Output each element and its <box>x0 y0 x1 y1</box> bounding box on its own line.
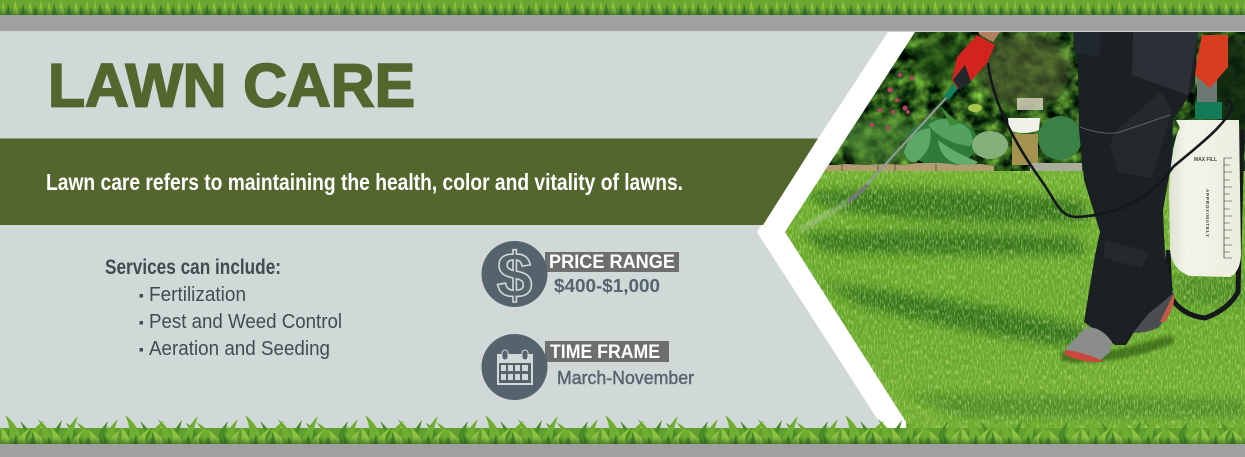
gloves <box>952 32 1228 90</box>
time value: March-November <box>557 368 694 388</box>
top grass strip <box>0 0 1245 15</box>
price range block <box>482 239 679 311</box>
title: LAWN CARE <box>48 52 415 120</box>
trousers <box>1073 32 1198 345</box>
tank side text: APPROXIMATELY <box>1205 189 1210 237</box>
lawn <box>780 171 1245 444</box>
stone edging <box>826 163 994 171</box>
shoes <box>1065 292 1174 362</box>
service: aeration and seeding: Aeration and Seeding <box>149 337 330 360</box>
bottom grey bar <box>0 444 1245 457</box>
white chevron stripe <box>757 32 915 444</box>
shadow under feet <box>1060 335 1176 363</box>
services heading: Services can include: <box>105 255 281 279</box>
icon: calendar <box>482 334 548 400</box>
price label bar <box>545 252 679 272</box>
list bullets <box>140 294 143 352</box>
intro statement: Lawn care refers to maintaining the health, color and vitality of lawns. <box>46 169 683 195</box>
photo: worker spraying lawn <box>780 32 1245 444</box>
price label: PRICE RANGE <box>549 252 675 273</box>
icon: dollar coin <box>482 239 548 311</box>
service: pest and weed control: Pest and Weed Control <box>149 310 342 333</box>
top grey bar <box>0 15 1245 32</box>
tank markings: MAX FILL <box>1194 157 1217 163</box>
spray hose <box>988 63 1231 217</box>
bottom grass <box>0 412 1245 444</box>
strap <box>1168 130 1242 318</box>
time label: TIME FRAME <box>550 342 660 363</box>
price value: $400-$1,000 <box>554 276 660 296</box>
icon: dollar coin: $ <box>497 239 532 311</box>
green band <box>0 138 818 225</box>
panel: grey chevron background <box>0 32 888 444</box>
services list <box>105 255 342 360</box>
garden background <box>780 32 1245 174</box>
spray wand <box>800 84 958 230</box>
time label bar <box>545 341 669 362</box>
service: fertilization: Fertilization <box>149 283 246 306</box>
time frame block <box>482 334 694 400</box>
sprayer tank <box>1169 70 1241 277</box>
